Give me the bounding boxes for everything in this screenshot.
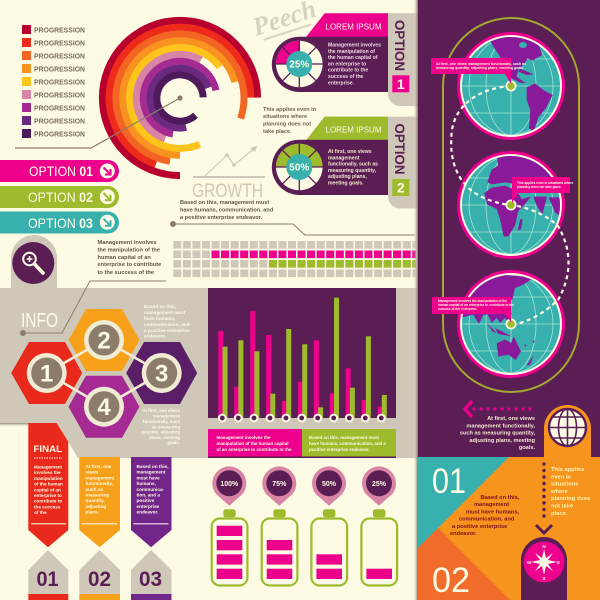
growth heading and chart: GROWTH	[192, 181, 263, 202]
battery 25%: 25%	[372, 481, 387, 488]
pin: globe 1	[506, 80, 516, 92]
text: hexagon note bottom: quantity, adjusting	[141, 430, 180, 435]
ribbon: orange: plans.	[86, 510, 99, 515]
growth description: Based on this, management must	[180, 200, 269, 206]
ribbon: orange: measuring	[86, 492, 109, 498]
growth description: have humans, communication, and	[180, 208, 274, 214]
arrow: dotted left	[465, 401, 532, 417]
legend: progression: PROGRESSION	[34, 38, 85, 48]
growth heading and chart	[192, 146, 265, 202]
text: hexagon note top: Based on this,	[144, 304, 176, 309]
pin: globe 3	[506, 318, 516, 330]
route outline	[443, 18, 579, 392]
panel: option 2: adjusting plans,	[328, 174, 367, 180]
leader line: info	[20, 281, 166, 336]
tag: 01	[28, 550, 68, 600]
battery 25%	[361, 466, 397, 586]
caption: green	[302, 429, 396, 458]
panel: bottom right: management	[474, 502, 509, 508]
text: magnifier note: Management involves	[98, 240, 157, 246]
donut: 50%: 50%	[289, 162, 309, 174]
callout: globe 3	[432, 297, 514, 322]
radial progress chart	[15, 7, 271, 189]
text: bottom right note: adjusting plans, meeting	[469, 438, 536, 444]
text: hexagon note bottom: functionally, such	[143, 419, 180, 424]
node 2: 2	[97, 328, 111, 354]
heat grid	[173, 245, 416, 273]
battery 100%: 100%	[220, 481, 239, 488]
ribbon: orange: At first, one	[86, 464, 112, 469]
panel: option 1: enterprise.	[328, 80, 355, 86]
tag: 02	[79, 550, 120, 600]
panel: option 2: management	[328, 155, 360, 161]
ribbon: purple: tion, and a	[136, 492, 160, 498]
text: hexagon note top: have humans,	[144, 316, 175, 321]
legend: progression: PROGRESSION	[34, 130, 85, 138]
callout: globe 2: This applies even in situations where	[517, 181, 574, 185]
ribbon: purple: enterprise	[136, 504, 160, 509]
heading: INFO: INFO	[21, 310, 58, 332]
ribbon: orange: adjusting	[86, 504, 106, 509]
panel: option 1	[272, 13, 418, 106]
ribbon: purple: positive	[136, 498, 155, 503]
icon: compass	[521, 537, 567, 600]
side note: applies: situations where	[263, 114, 307, 120]
leader line: growth	[170, 222, 415, 235]
text: magnifier note: human capital of an	[98, 255, 151, 261]
text: bottom right note: goals.	[519, 445, 535, 451]
legend: progression: PROGRESSION	[34, 26, 85, 34]
tab: globe icon	[544, 405, 591, 458]
text: magnifier note: the manipulation of the	[98, 248, 160, 254]
node 1: 1	[40, 360, 53, 388]
tag: 03: 03	[139, 568, 162, 591]
icon: magnifier	[12, 242, 54, 284]
panel: option 2: functionally, such as	[328, 162, 378, 168]
panel: option 1: contribute to the	[328, 68, 368, 74]
ribbon: orange: management	[86, 475, 115, 480]
dashed route	[451, 86, 568, 325]
growth description: a positive enterprise endeavor.	[180, 215, 263, 221]
text: orange note: planning does	[551, 496, 590, 502]
side note: applies: This applies even in	[263, 107, 317, 113]
text: hexagon note bottom: plans, meeting	[149, 435, 180, 440]
text: hexagon note bottom: At first, one views	[142, 408, 181, 413]
ribbon: final: manipulation	[34, 476, 63, 481]
node 4: 4	[97, 394, 111, 421]
panel: option 2: OPTION	[392, 124, 408, 174]
legend: progression: PROGRESSION	[34, 90, 85, 100]
callout: globe 3: Management involves the manipulation of the	[438, 299, 507, 303]
option 03 bar	[0, 212, 119, 234]
node 3	[142, 353, 182, 393]
caption: pink: manipulation of the human capital	[216, 441, 288, 446]
icon: compass: W	[527, 560, 532, 565]
node 3: 3	[155, 360, 168, 388]
text: hexagon note top: a positive enterprise	[144, 328, 190, 333]
side note: applies: planning does not	[263, 122, 311, 128]
globe: asia pacific	[455, 268, 567, 380]
legend: progression: PROGRESSION	[34, 116, 85, 126]
ribbon: purple: endeavor.	[136, 510, 158, 515]
ribbon: orange: such as	[86, 487, 103, 492]
legend: progression: PROGRESSION	[34, 78, 85, 86]
ribbon: orange: quantity,	[86, 498, 105, 503]
panel: option 1: OPTION	[392, 20, 408, 71]
panel: option 1: success of the	[328, 74, 364, 80]
globe: africa	[455, 149, 567, 261]
ribbon: orange: views	[86, 470, 99, 475]
text: hexagon note bottom: management	[153, 414, 181, 418]
panel: option 2: measuring quantity,	[328, 168, 377, 174]
panel: option 2	[272, 117, 418, 208]
ribbon: purple: communica-	[136, 487, 165, 492]
icon: compass: N	[542, 544, 546, 549]
text: hexagon note bottom: goals.	[167, 440, 180, 445]
icon: compass: S	[542, 576, 546, 581]
panel: bottom right: must have humans,	[466, 509, 520, 515]
text: orange note: where	[550, 489, 569, 495]
pin: globe 2	[506, 200, 516, 210]
donut: 50%	[274, 142, 324, 192]
ribbon: final: contribute to	[34, 499, 62, 504]
panel: option 1: Management involves	[328, 42, 381, 48]
text: hexagon note bottom: as measuring	[152, 424, 180, 429]
callout: globe 2	[512, 177, 574, 203]
tag: 01: 01	[36, 568, 59, 591]
legend: progression: PROGRESSION	[34, 64, 85, 74]
panel: option 2: At first, one views	[328, 149, 372, 155]
ribbon: final	[28, 423, 68, 547]
text: orange note: not take	[551, 504, 574, 510]
ribbon: final: of the	[34, 510, 47, 515]
icon: compass: E	[557, 560, 560, 565]
node 2	[84, 320, 124, 360]
panel: right column background	[418, 0, 600, 458]
text: orange note: situations	[551, 482, 578, 488]
callout: globe 2: planning does not take place.	[517, 185, 562, 189]
panel: option 1: an enterprise to	[328, 61, 366, 67]
text: orange note: even in	[551, 474, 571, 480]
text: hexagon note top: endeavor.	[144, 334, 166, 338]
text: magnifier note: enterprise to contribute	[98, 262, 161, 268]
ribbon: final: enterprise to	[34, 493, 62, 498]
ribbon: final: Management	[34, 464, 63, 470]
panel: option 2: 2	[397, 180, 405, 196]
panel: option 1: LOREM IPSUM	[326, 21, 382, 31]
arrow: dotted down	[536, 462, 552, 533]
text: orange note: place.	[551, 511, 568, 517]
globe: americas	[455, 30, 567, 142]
panel: bottom right: 01	[432, 462, 466, 501]
option 02 bar: OPTION 02	[28, 189, 93, 205]
ribbon: purple: humans,	[136, 481, 156, 486]
caption: green: Based on this, management must	[309, 435, 380, 440]
battery 75%: 75%	[272, 481, 287, 488]
ribbon: final: capital of an	[34, 487, 61, 492]
text: bottom right note: At first, one views	[487, 416, 535, 422]
node 4	[84, 387, 124, 427]
panel: option 2: meeting goals.	[328, 180, 364, 186]
ribbon: orange: functionally,	[86, 481, 113, 486]
tag: 03	[131, 550, 172, 600]
text: bottom right note: management functionally,	[466, 423, 535, 429]
option 02 bar	[0, 186, 119, 208]
legend: progression	[22, 25, 85, 138]
callout: globe 1: At first, one views management functionally, such as	[436, 62, 526, 66]
ribbon: final: FINAL	[34, 444, 62, 455]
ribbon: final: involves the	[34, 470, 61, 475]
callout: globe 3: human capital of an enterprise to contribute to the	[438, 303, 514, 307]
panel: bottom right: Based on this,	[480, 495, 520, 501]
node 1	[27, 353, 67, 393]
donut: 25%: 25%	[289, 60, 309, 70]
panel: bottom right	[418, 457, 600, 600]
battery 50%	[311, 466, 347, 586]
ribbon: orange	[79, 457, 120, 547]
panel: info background	[0, 235, 418, 458]
option 01 bar	[0, 160, 119, 182]
battery 50%: 50%	[322, 481, 337, 488]
hexagon diagram	[11, 309, 197, 438]
text: hexagon note top: management must	[144, 310, 186, 315]
callout: globe 3: success of the enterprise.	[438, 307, 477, 311]
donut: 25%	[274, 39, 324, 89]
text: orange note: This applies	[551, 467, 585, 473]
shadow under info panel	[0, 423, 57, 427]
ribbon: final: of the human	[34, 482, 63, 487]
caption: green: positive enterprise endeavor.	[309, 447, 370, 452]
panel: option 1: the manipulation of	[328, 49, 375, 55]
bar chart	[208, 288, 396, 421]
text: hexagon note top: communication, and	[144, 322, 190, 327]
panel: bottom right: communication, and	[459, 516, 515, 522]
tag: 02: 02	[88, 568, 111, 591]
panel: option 1: 1	[397, 76, 405, 92]
battery 100%	[212, 466, 247, 586]
panel: option 2: LOREM IPSUM	[326, 125, 382, 135]
callout: globe 1: measuring quantity, adjusting plans, meeting goals.	[436, 66, 524, 70]
ribbon: purple	[131, 457, 172, 547]
ribbon: purple: must have	[136, 475, 160, 480]
caption: pink: Management involves the	[216, 435, 271, 440]
side note: applies: take place.	[263, 129, 292, 135]
ribbon: purple: Based on this,	[136, 464, 169, 469]
text: bottom right note: such as measuring quantity,	[460, 431, 535, 437]
callout: globe 1	[431, 58, 526, 84]
caption: pink: of an enterprise to contribute to the	[216, 447, 292, 452]
text: magnifier note: to the success of the	[98, 270, 154, 276]
panel: bottom right: 02	[432, 561, 470, 600]
caption: green: have humans, communication, and a	[309, 441, 386, 446]
panel: bottom right: endeavor.	[450, 531, 477, 537]
panel: bottom right: a positive enterprise	[452, 524, 507, 530]
option 03 bar: OPTION 03	[28, 215, 93, 231]
panel: option 1: the human capital of	[328, 55, 378, 61]
caption: pink	[208, 429, 302, 458]
ribbon: final: the success	[34, 504, 61, 509]
legend: progression: PROGRESSION	[34, 52, 85, 60]
battery 75%	[262, 466, 297, 586]
ribbon: purple: management	[136, 470, 166, 475]
option 01 bar: OPTION 01	[29, 163, 93, 179]
legend: progression: PROGRESSION	[34, 104, 85, 112]
